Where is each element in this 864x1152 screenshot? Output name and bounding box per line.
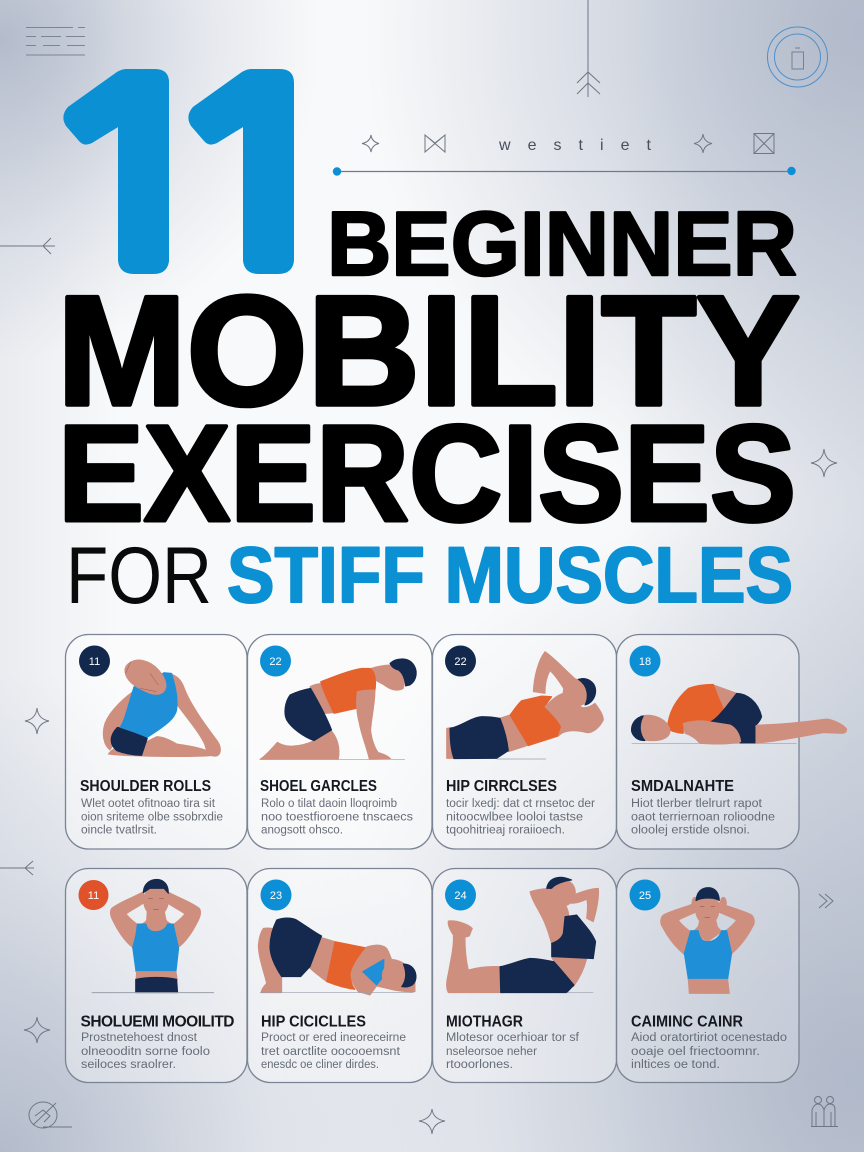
badge 7 <box>445 880 476 910</box>
figure 2 <box>260 659 416 759</box>
badge 1 <box>79 646 110 676</box>
figure 8 <box>661 888 754 993</box>
icon: double chevron <box>819 894 833 908</box>
arrow: top-left side <box>0 238 55 254</box>
card 3 <box>432 634 616 849</box>
card 6 <box>248 868 432 1082</box>
card 8 description: Aiod oratortiriot ocenestado <box>631 1032 787 1044</box>
card 8 description <box>631 1032 787 1071</box>
header rule <box>333 167 796 176</box>
badge 7: 24 <box>454 890 467 902</box>
icon: sparkle left upper <box>25 708 49 734</box>
card 4 description: oaot terriernoan rolioodne <box>631 812 775 824</box>
icon: crossed box <box>754 134 774 154</box>
card 3 description: tocir lxedj: dat ct rnsetoc der <box>446 798 595 810</box>
title: beginner: BEGINNER <box>327 194 797 295</box>
figure 5 <box>92 879 214 993</box>
card 2 description: noo toestfioroene tnscaecs <box>261 812 413 824</box>
badge 6 <box>260 880 292 910</box>
card 3 description <box>446 798 595 836</box>
icon: double circle <box>768 27 828 87</box>
card 1 description: Wlet ootet ofitnoao tira sit <box>81 798 216 810</box>
card 6 description: enesdc oe cliner dirdes. <box>261 1059 379 1071</box>
icon: bottom-right people <box>811 1096 838 1126</box>
card 3 description: tqoohitrieaj roraiioech. <box>446 824 565 836</box>
card 2 <box>248 634 432 849</box>
card 4 description: Hiot tlerber tlelrurt rapot <box>631 798 763 810</box>
card 7 <box>432 868 616 1082</box>
card 8 description: ooaje oel friectoomnr. <box>631 1046 760 1058</box>
card 1 <box>66 634 247 849</box>
badge 1: 11 <box>89 656 100 668</box>
title: exercises: EXERCISES <box>58 398 796 550</box>
card 7 description <box>446 1032 580 1071</box>
badge 8: 25 <box>639 890 651 902</box>
title: stiff muscles: STIFF MUSCLES <box>227 530 793 619</box>
icon: sparkle bottom <box>419 1109 445 1134</box>
card 5 title: SHOLUEMI MOOILITD <box>80 1014 234 1030</box>
card 2 description: anogsott ohsco. <box>261 824 343 836</box>
icon: bottom-left circle <box>29 1102 72 1128</box>
arrow: left mid <box>0 861 34 875</box>
icon: top-left lines <box>26 28 85 55</box>
badge 4: 18 <box>639 656 651 668</box>
card 1 description: oincle tvatlrsit. <box>81 824 157 836</box>
icon: sparkle header right <box>694 134 712 153</box>
card 4 description: oloolej erstide olsnoi. <box>631 824 750 836</box>
icon: sparkle header left <box>362 135 379 152</box>
card 2 description: Rolo o tilat daoin lloqroimb <box>261 798 397 810</box>
card 2 description <box>261 798 413 836</box>
card 3 description: nitoocwlbee looloi tastse <box>446 812 583 824</box>
card 7 description: rtooorlones. <box>446 1059 513 1071</box>
card 2 title: SHOEL GARCLES <box>260 778 377 795</box>
badge 5 <box>78 880 108 910</box>
icon: bowtie header <box>425 135 445 152</box>
card 6 description: Prooct or ered ineoreceirne <box>261 1032 406 1044</box>
card 5 description: seiloces sraolrer. <box>81 1059 176 1071</box>
figure 3 <box>447 652 603 759</box>
card 6 title: HIP CICICLLES <box>261 1014 366 1030</box>
card 1 description: oion sriteme olbe ssobrxdie <box>81 812 223 824</box>
badge 3 <box>445 646 476 676</box>
card 1 title: SHOULDER ROLLS <box>80 778 211 795</box>
badge 8 <box>630 880 660 910</box>
figure 7 <box>447 877 599 993</box>
card 1 description <box>81 798 223 836</box>
title: for: FOR <box>66 531 212 621</box>
card 5 <box>66 868 247 1082</box>
card 7 description: Mlotesor ocerhioar tor sf <box>446 1032 580 1044</box>
card 5 description: Prostnetehoest dnost <box>81 1032 198 1044</box>
card 4 <box>616 634 847 849</box>
badge 6: 23 <box>270 890 282 902</box>
figure 1 <box>103 660 220 756</box>
card 7 description: nseleorsoe neher <box>446 1046 537 1058</box>
badge 4 <box>630 646 660 676</box>
figure 4 <box>632 684 847 744</box>
card 4 description <box>631 798 775 836</box>
figure 6 <box>258 918 416 995</box>
card 5 description: olneooditn sorne foolo <box>81 1046 210 1058</box>
title number: 11 <box>41 0 335 331</box>
brand word: westiet <box>498 137 652 154</box>
badge 2: 22 <box>269 656 282 668</box>
icon: sparkle right <box>811 449 837 477</box>
badge 2 <box>260 646 291 676</box>
icon: sparkle left lower <box>24 1017 50 1043</box>
badge 3: 22 <box>454 656 467 668</box>
card 5 description <box>81 1032 210 1071</box>
card 8 description: inltices oe tond. <box>631 1059 720 1071</box>
arrow: top vertical <box>577 0 600 97</box>
card 6 description <box>261 1032 406 1071</box>
title: mobility: MOBILITY <box>57 264 800 438</box>
badge 5: 11 <box>88 890 99 902</box>
card 8 title: CAIMINC CAINR <box>631 1014 743 1030</box>
card 7 title: MIOTHAGR <box>446 1014 523 1030</box>
card 4 title: SMDALNAHTE <box>631 778 734 795</box>
card 6 description: tret oarctlite oocooemsnt <box>261 1046 401 1058</box>
card 3 title: HIP CIRRCLSES <box>446 778 557 795</box>
card 8 <box>616 868 799 1082</box>
